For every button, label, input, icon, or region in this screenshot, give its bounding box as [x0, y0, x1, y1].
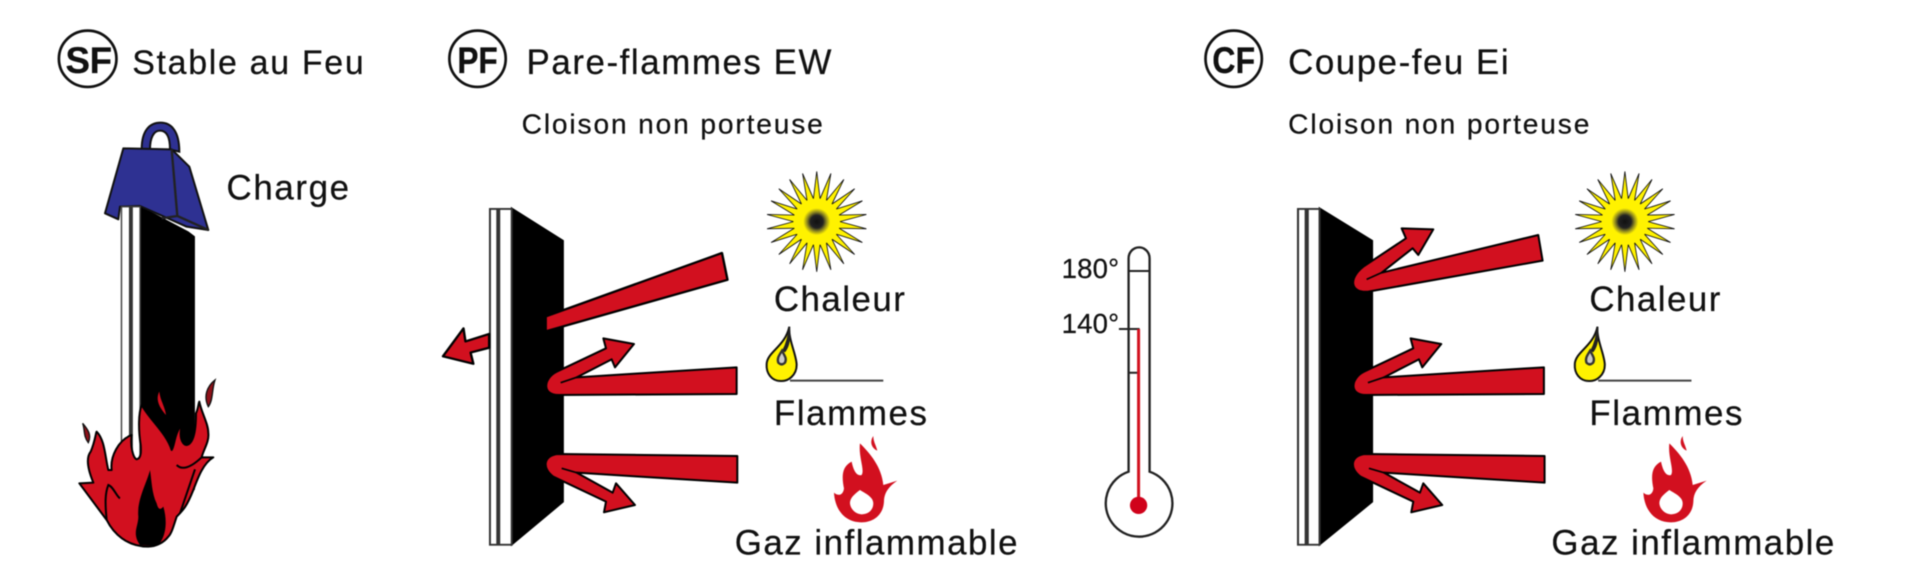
- label: Charge: Charge: [227, 169, 349, 208]
- badge: CF: [1206, 31, 1262, 87]
- icon: gas flame: [1643, 436, 1707, 522]
- label: Flammes: Flammes: [774, 394, 927, 433]
- label: Chaleur: Chaleur: [1589, 280, 1721, 319]
- icon: match flame: [1575, 327, 1691, 381]
- icon: gas flame: [834, 436, 897, 522]
- label: Gaz inflammable: Gaz inflammable: [1551, 524, 1834, 563]
- heading: Stable au Feu: Stable au Feu: [132, 44, 364, 82]
- subheading: Cloison non porteuse: Cloison non porteuse: [1288, 108, 1589, 139]
- arrow: heat crossing the wall: [443, 328, 489, 364]
- arrow: flames reflected up: [546, 338, 737, 395]
- arrow: gas reflected down: [1353, 454, 1545, 512]
- badge: PF: PF: [457, 40, 498, 81]
- arrow: heat reflected up: [1353, 228, 1543, 292]
- badge: CF: CF: [1212, 40, 1255, 81]
- arrow: gas reflected down: [546, 454, 737, 512]
- wall: glass edge: [1298, 209, 1320, 545]
- icon: fire: [79, 380, 215, 547]
- icon: sun: [1575, 171, 1675, 272]
- label: Chaleur: Chaleur: [774, 280, 905, 319]
- thermometer: [1062, 247, 1172, 537]
- badge: SF: SF: [66, 40, 112, 81]
- subheading: Cloison non porteuse: Cloison non porteuse: [522, 108, 823, 139]
- heading: Coupe-feu Ei: Coupe-feu Ei: [1288, 43, 1509, 82]
- label: Gaz inflammable: Gaz inflammable: [735, 524, 1018, 563]
- wall: black face: [1320, 208, 1372, 545]
- arrow: heat bar: [546, 253, 728, 331]
- wall: black face: [140, 206, 195, 490]
- wall: black face: [512, 208, 563, 545]
- illustration: wall: [443, 208, 728, 545]
- panel: Coupe-feu Ei: [1206, 31, 1834, 563]
- panel: Stable au Feu: [59, 31, 364, 547]
- label: 180°: 180°: [1062, 253, 1119, 284]
- illustration: loaded wall in flames: [79, 123, 215, 547]
- arrow: flames reflected up: [1354, 338, 1544, 395]
- wall: glass edge: [121, 207, 140, 461]
- panel: Pare-flammes EW: [443, 31, 1018, 563]
- label: 140°: 140°: [1062, 308, 1119, 339]
- wall: glass edge: [490, 209, 512, 545]
- badge: SF: [59, 31, 116, 87]
- illustration: wall: [1298, 208, 1372, 545]
- icon: match flame: [767, 327, 883, 381]
- badge: PF: [449, 31, 506, 87]
- icon: sun: [767, 171, 867, 272]
- heading: Pare-flammes EW: Pare-flammes EW: [527, 43, 832, 82]
- icon: thermometer: [1106, 247, 1172, 537]
- label: Flammes: Flammes: [1589, 394, 1742, 433]
- icon: weight: [105, 123, 208, 230]
